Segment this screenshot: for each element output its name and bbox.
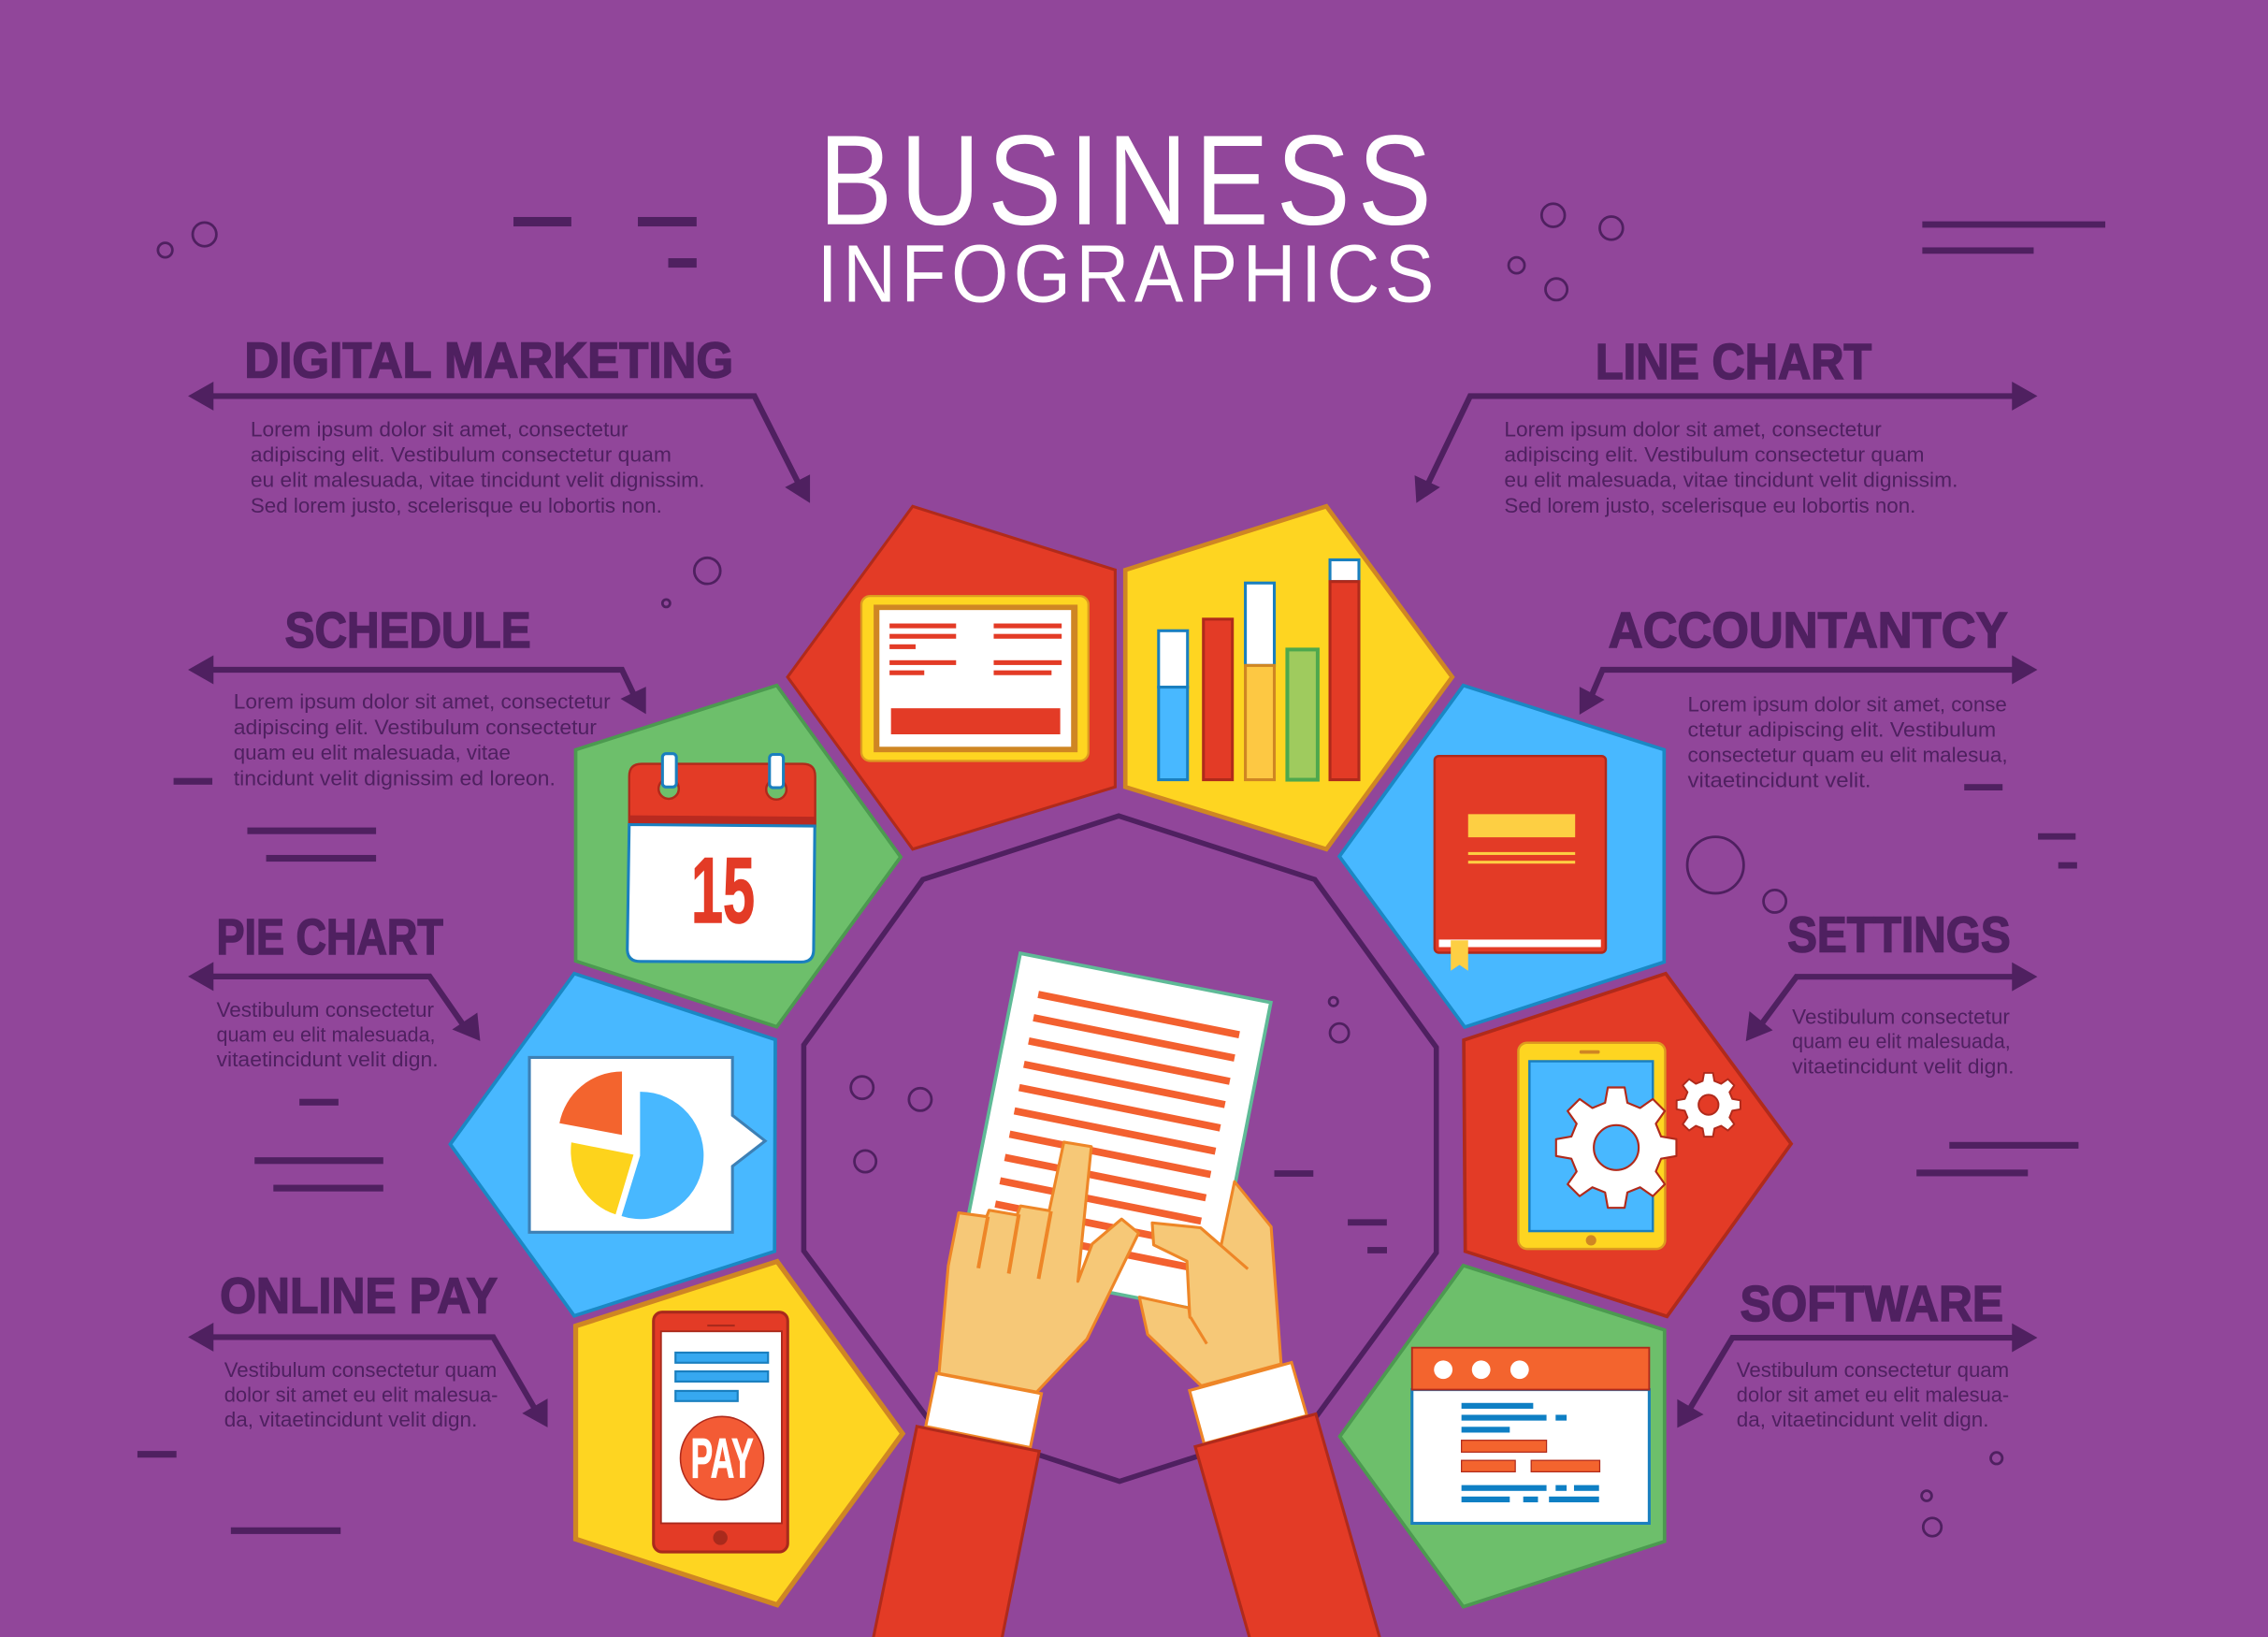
right cuff	[1190, 1362, 1307, 1443]
body text: Lorem ipsum dolor sit amet, consectetur	[251, 417, 628, 441]
icon: browser window	[1412, 1348, 1649, 1523]
arrow	[188, 962, 480, 1041]
icon: large gear	[1556, 1087, 1676, 1208]
body text: Lorem ipsum dolor sit amet, consectetur	[1504, 417, 1882, 441]
body text: adipiscing elit. Vestibulum consectetur quam	[251, 443, 672, 467]
arrow	[1746, 963, 2037, 1041]
body text: dolor sit amet eu elit malesua-	[1737, 1383, 2009, 1406]
body text: eu elit malesuada, vitae tincidunt velit dignissim.	[1504, 469, 1957, 492]
panel: online pay hexagon	[576, 1262, 903, 1605]
panel: software text	[1677, 1276, 2037, 1431]
heading: LINE CHART	[1596, 334, 1871, 390]
body text	[224, 1358, 498, 1431]
panel: line chart hexagon	[1125, 506, 1452, 849]
body text	[1504, 417, 1957, 517]
icon: smartphone with pay button	[654, 1312, 787, 1552]
body text: adipiscing elit. Vestibulum consectetur quam	[1504, 443, 1925, 467]
icon: calendar: 15	[691, 838, 755, 942]
body text: vitaetincidunt velit dign.	[1792, 1054, 2015, 1078]
body text: eu elit malesuada, vitae tincidunt velit dignissim.	[251, 469, 704, 492]
panel: digital marketing text	[188, 333, 810, 517]
arrow	[188, 1323, 548, 1427]
arrow	[188, 656, 646, 714]
document	[959, 953, 1271, 1312]
body text	[1688, 692, 2008, 792]
heading: PIE CHART	[217, 909, 443, 965]
body text: consectetur quam eu elit malesua,	[1688, 744, 2008, 767]
body text: da, vitaetincidunt velit dign.	[1737, 1408, 1989, 1431]
body text	[234, 689, 611, 790]
body text: Sed lorem justo, scelerisque eu lobortis non.	[251, 494, 662, 517]
heading: SCHEDULE	[285, 602, 531, 659]
icon: bar chart	[1159, 559, 1359, 780]
icon: tablet with gears	[1518, 1043, 1741, 1249]
panel: settings hexagon	[1464, 974, 1791, 1316]
icon: pie chart card	[529, 1057, 765, 1232]
body text: Lorem ipsum dolor sit amet, conse	[1688, 692, 2007, 716]
body text: vitaetincidunt velit dign.	[217, 1048, 439, 1071]
icon: small gear	[1677, 1073, 1741, 1137]
panel: pie chart text	[188, 909, 480, 1071]
icon: presentation board	[861, 596, 1089, 761]
body text: quam eu elit malesuada,	[1792, 1030, 2011, 1053]
panel: settings text	[1746, 907, 2037, 1078]
heading: SETTINGS	[1787, 907, 2011, 963]
icon: smartphone with pay button: PAY	[690, 1427, 754, 1490]
body text: Vestibulum consectetur	[1792, 1005, 2010, 1028]
body text	[1737, 1358, 2009, 1431]
panel: digital marketing hexagon	[787, 506, 1115, 849]
left cuff	[926, 1373, 1042, 1448]
arrow	[1677, 1324, 2037, 1427]
body text: ctetur adipiscing elit. Vestibulum	[1688, 718, 1996, 742]
arrow	[1580, 656, 2037, 715]
panel: schedule hexagon	[576, 686, 901, 1027]
heading: DIGITAL MARKETING	[244, 333, 733, 389]
panel: pie chart hexagon	[450, 974, 775, 1316]
icon: calendar	[628, 754, 816, 962]
body text: quam eu elit malesuada, vitae	[234, 741, 511, 764]
panel: accountancy text	[1580, 602, 2037, 792]
body text: Vestibulum consectetur	[217, 998, 435, 1021]
heading: SOFTWARE	[1741, 1276, 2003, 1332]
body text: adipiscing elit. Vestibulum consectetur	[234, 716, 598, 739]
arrow	[1415, 382, 2037, 503]
heading: ACCOUNTANTCY	[1609, 602, 2008, 659]
panel: accountancy hexagon	[1339, 686, 1664, 1027]
title	[817, 109, 1439, 320]
icon: book	[1435, 756, 1606, 971]
body text: quam eu elit malesuada,	[217, 1022, 436, 1046]
left hand	[939, 1142, 1138, 1392]
title: BUSINESS	[818, 109, 1439, 253]
panel: schedule text	[188, 602, 646, 790]
decorative circles and dashes	[137, 204, 2105, 1536]
panel: line chart text	[1415, 334, 2037, 517]
body text: Vestibulum consectetur quam	[1737, 1358, 2009, 1382]
body text: Lorem ipsum dolor sit amet, consectetur	[234, 689, 611, 713]
left sleeve	[873, 1427, 1039, 1637]
right hand	[1139, 1181, 1281, 1386]
central decagon outline	[803, 816, 1437, 1482]
panel: online pay text	[188, 1268, 548, 1431]
body text: tincidunt velit dignissim ed loreon.	[234, 766, 556, 790]
title: INFOGRAPHICS	[817, 228, 1439, 320]
body text: vitaetincidunt velit.	[1688, 769, 1871, 792]
body text	[1792, 1005, 2015, 1078]
illustration: document held in hands	[873, 953, 1381, 1637]
body text	[217, 998, 439, 1071]
panel: software hexagon	[1340, 1266, 1665, 1607]
body text: Vestibulum consectetur quam	[224, 1358, 497, 1382]
right sleeve	[1195, 1414, 1381, 1637]
body text: Sed lorem justo, scelerisque eu lobortis non.	[1504, 494, 1915, 517]
body text	[251, 417, 704, 517]
body text: da, vitaetincidunt velit dign.	[224, 1408, 477, 1431]
body text: dolor sit amet eu elit malesua-	[224, 1383, 498, 1407]
arrow	[188, 382, 810, 503]
heading: ONLINE PAY	[220, 1268, 498, 1324]
